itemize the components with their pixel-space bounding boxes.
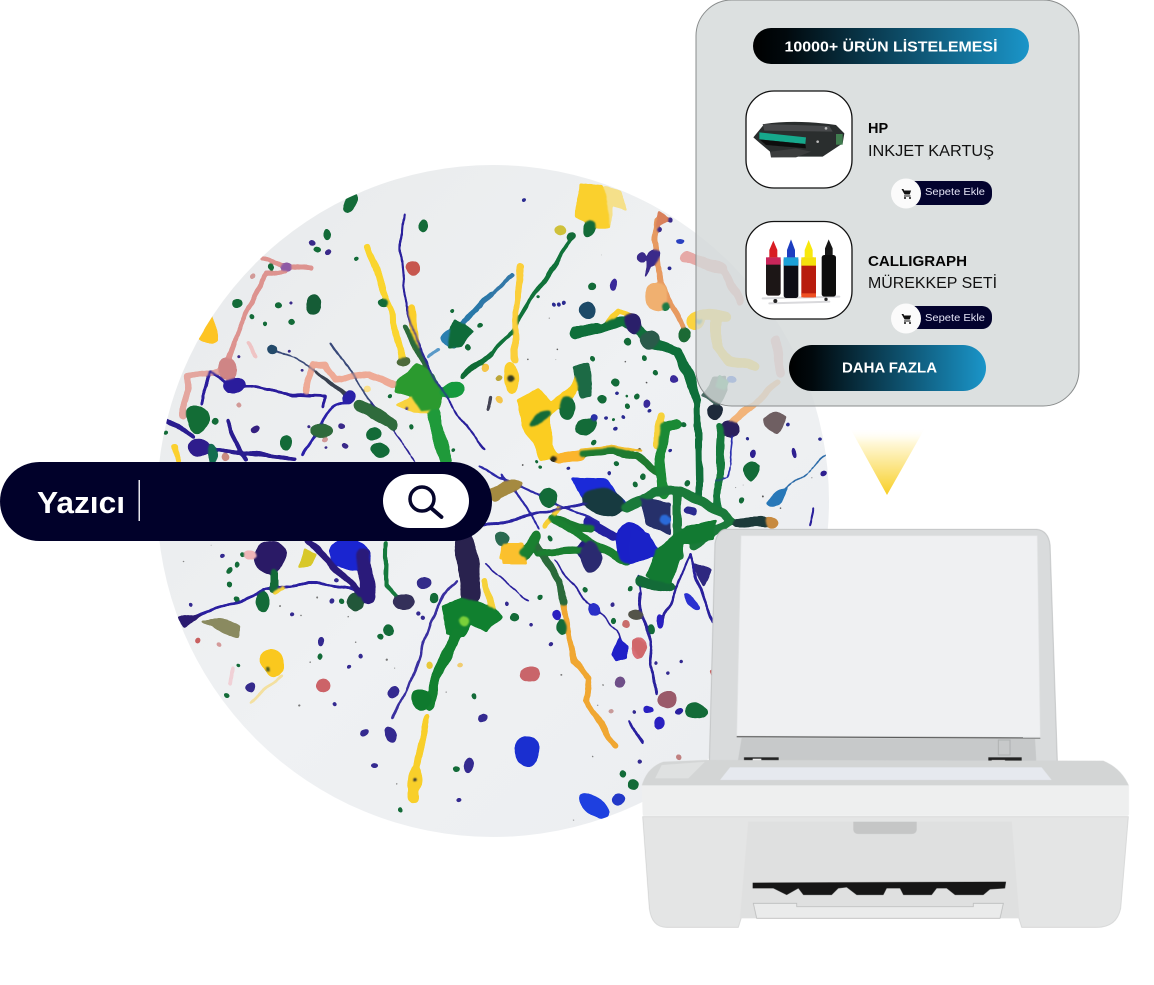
product 1 name	[868, 121, 994, 160]
lower paper tray	[753, 903, 1003, 918]
search bar	[0, 462, 492, 541]
text cursor	[138, 480, 140, 521]
output slot	[753, 882, 1006, 895]
add to cart button 1	[891, 178, 992, 208]
add to cart button 1: Sepete Ekle	[925, 187, 985, 198]
splatter: far right behind printer	[628, 520, 717, 788]
paint splatter circle	[150, 160, 840, 850]
paper guide clips	[744, 740, 1022, 767]
paper feed strip	[737, 738, 1037, 768]
lid paper sheet	[737, 536, 1040, 737]
product 1 name: INKJET KARTUŞ	[868, 143, 994, 160]
printer body deck	[642, 760, 1129, 786]
product 2 name: CALLIGRAPH	[868, 254, 967, 270]
product panel	[696, 0, 1079, 406]
lower body	[643, 817, 1128, 927]
listing heading pill	[753, 28, 1029, 64]
product 2 name: MÜREKKEP SETİ	[868, 273, 997, 292]
more button	[789, 345, 986, 391]
more button: DAHA FAZLA	[842, 360, 938, 376]
search term: Yazıcı	[37, 485, 125, 520]
printer	[642, 529, 1129, 927]
product card 2: ink bottles image	[746, 222, 852, 319]
listing heading pill: 10000+ ÜRÜN LİSTELEMESİ	[784, 38, 998, 56]
splatter: upper right	[480, 182, 827, 561]
tray tab	[853, 822, 917, 834]
front band	[642, 785, 1129, 816]
product card 1: toner image	[746, 91, 852, 188]
printer lid	[709, 529, 1057, 763]
product 1 name: HP	[868, 121, 888, 137]
add to cart button 2	[891, 304, 992, 334]
output tray recess	[740, 822, 1019, 918]
search button	[383, 474, 469, 528]
splatter: lower half	[178, 502, 649, 823]
arrow: yellow triangle pointing to printer	[850, 428, 925, 495]
splatter artwork	[166, 182, 827, 823]
product 2 name	[868, 254, 997, 292]
add to cart button 2: Sepete Ekle	[925, 313, 985, 324]
scanner glass	[720, 767, 1052, 780]
control panel	[655, 762, 705, 778]
splatter: upper left	[166, 194, 490, 463]
